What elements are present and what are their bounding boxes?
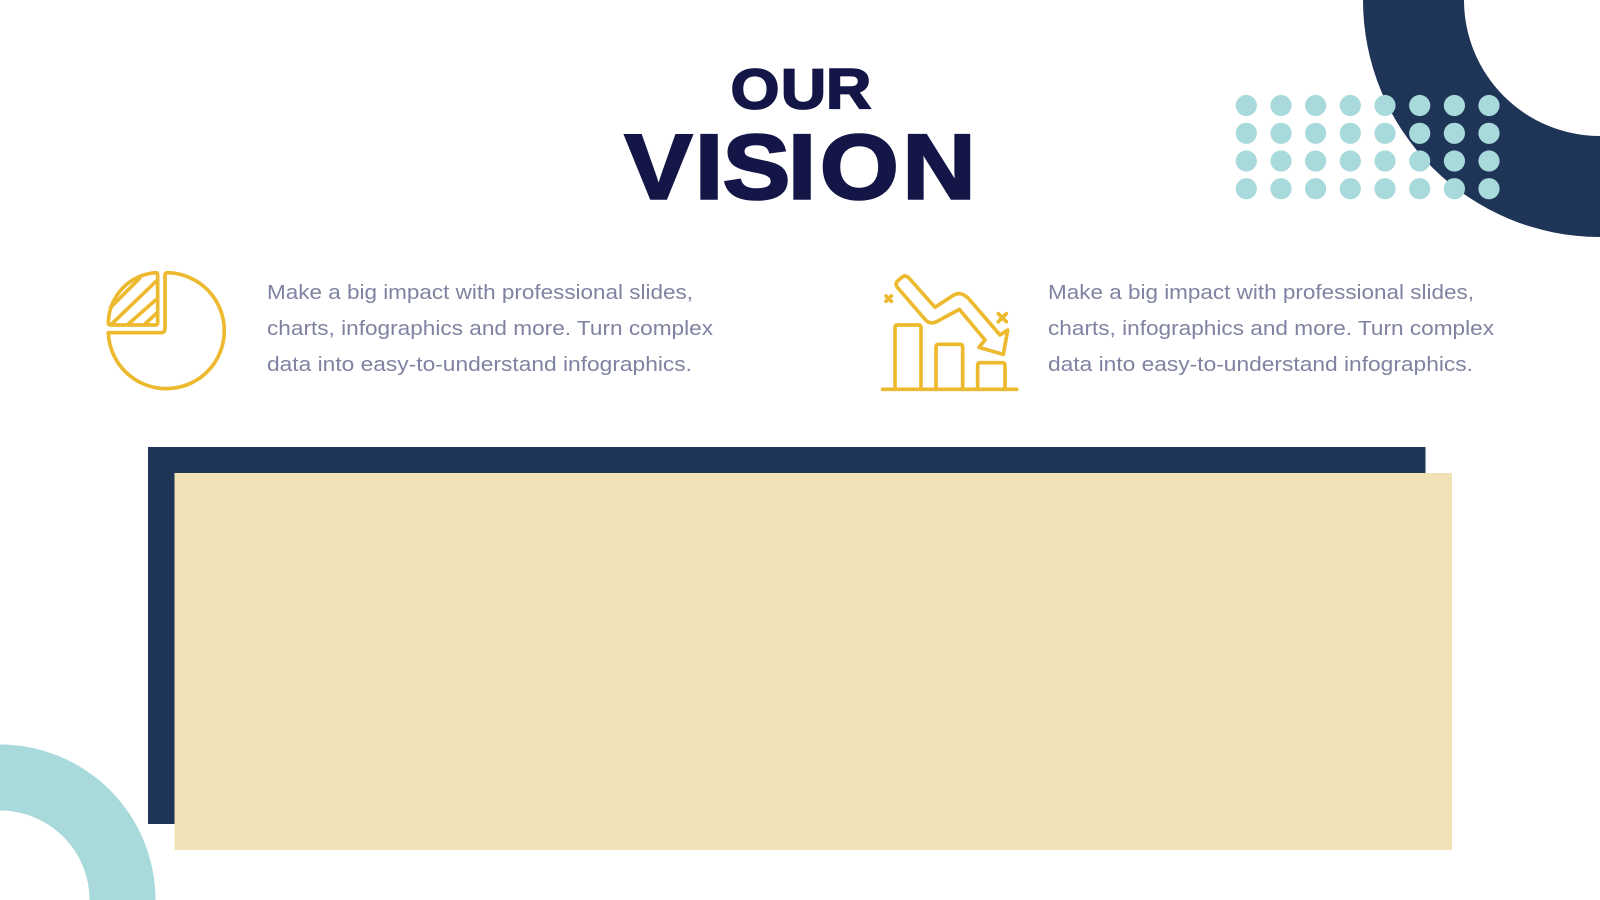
text block: right description: Make a big impact with professional slides,	[1048, 281, 1474, 304]
panel: cream rectangle	[174, 473, 1452, 850]
icon: pie chart	[108, 273, 224, 389]
text block: left description: charts, infographics and more. Turn complex	[267, 317, 714, 340]
title	[625, 57, 976, 218]
dot grid	[1236, 95, 1500, 199]
text block: left description: Make a big impact with professional slides,	[267, 281, 693, 304]
text block: right description: data into easy-to-understand infographics.	[1048, 353, 1473, 376]
title line: OUR: OUR	[731, 57, 871, 121]
decorative teal arc bottom left	[0, 744, 156, 900]
text block: right description: charts, infographics and more. Turn complex	[1048, 317, 1495, 340]
icon part: baseline	[883, 384, 1017, 395]
icon part: sparkle marks	[886, 296, 1006, 322]
decorative navy arc top right	[1363, 0, 1600, 237]
text block: right description	[1048, 281, 1495, 376]
title line: VISION: VISION	[625, 116, 976, 218]
icon part: bars	[895, 325, 1005, 389]
text block: left description	[267, 281, 714, 376]
panel: navy backing rectangle	[148, 447, 1426, 824]
icon part: down arrow	[896, 276, 1008, 354]
icon: declining bar chart with arrow	[883, 276, 1017, 389]
text block: left description: data into easy-to-understand infographics.	[267, 353, 692, 376]
